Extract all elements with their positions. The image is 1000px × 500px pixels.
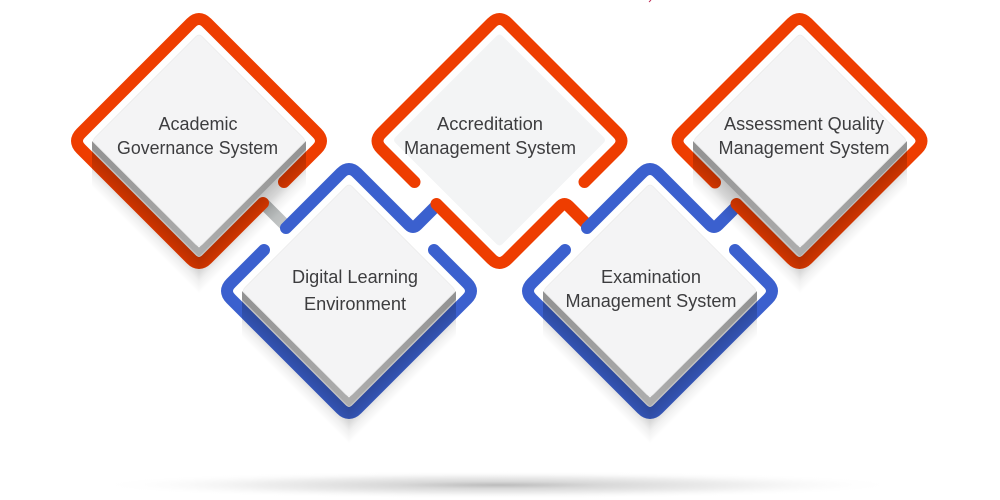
label: Examination (601, 267, 701, 287)
orange ring lower (436, 204, 586, 263)
diamond shadow (543, 291, 757, 444)
ground shadow (93, 471, 903, 499)
label: Accreditation (437, 114, 543, 134)
blue ring upper (286, 169, 435, 228)
diamond card (242, 185, 456, 406)
label (718, 114, 890, 158)
blue ring upper (587, 169, 736, 228)
diamond card (394, 34, 605, 246)
label: Governance System (117, 138, 278, 158)
orange ring (77, 19, 321, 263)
label: Digital Learning (292, 267, 418, 287)
orange ring upper (378, 19, 622, 182)
stray mark at top edge (649, 0, 651, 2)
panel: Accreditation Management System (378, 19, 622, 263)
diamond card (693, 35, 907, 256)
label: Assessment Quality (724, 114, 884, 134)
diamond shadow (242, 291, 456, 444)
panel: Examination Management System (528, 169, 772, 444)
label (292, 267, 418, 314)
diamond shadow (693, 141, 907, 294)
label: Management System (404, 138, 576, 158)
panel: Digital Learning Environment (227, 169, 471, 444)
diamond card (92, 35, 306, 256)
panel: Academic Governance System (77, 19, 321, 294)
diamond shadow (92, 141, 306, 294)
blue ring lower (528, 250, 772, 413)
label (404, 114, 576, 158)
label (117, 114, 278, 158)
label: Management System (718, 138, 890, 158)
label (566, 267, 736, 311)
panel: Assessment Quality Management System (678, 19, 922, 294)
blue ring lower (227, 250, 471, 413)
label: Management System (566, 291, 736, 311)
diamond card (543, 185, 757, 406)
orange ring (678, 19, 922, 263)
connector: grey link (263, 203, 286, 226)
label: Academic (158, 114, 238, 134)
label: Environment (304, 294, 406, 314)
